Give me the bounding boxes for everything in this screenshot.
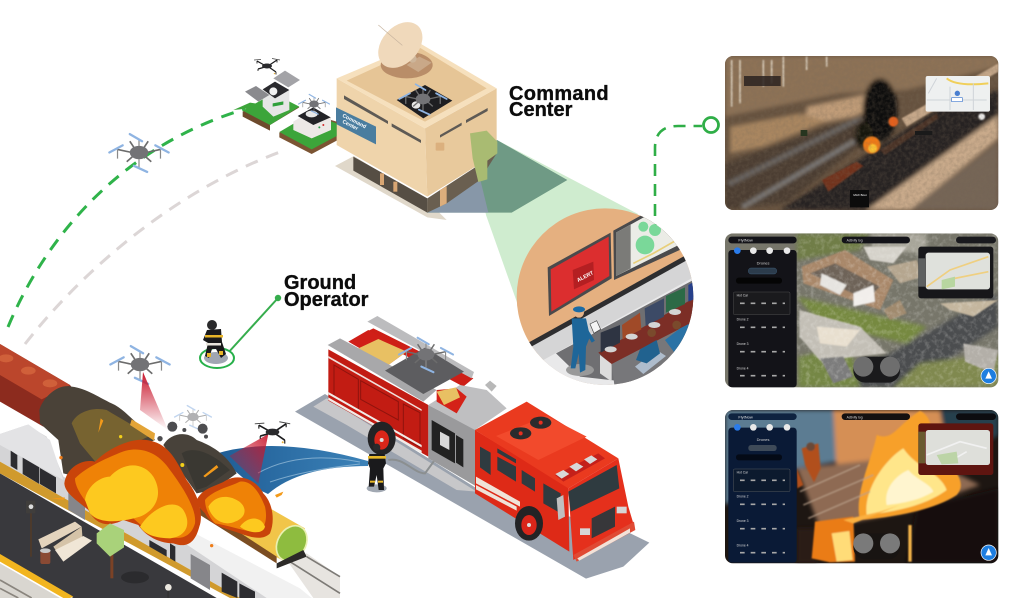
sidebar: drone list: FlytNow xyxy=(738,414,753,419)
sidebar: drone list: Drone 2 xyxy=(737,318,749,322)
lamp xyxy=(165,584,172,598)
joystick controls xyxy=(853,357,900,383)
front wheel xyxy=(515,506,543,541)
sidebar: drone list: Drone 3 xyxy=(737,342,749,346)
map screen xyxy=(613,216,680,280)
ground operator link line xyxy=(227,298,278,354)
satellite dish shadow and base xyxy=(381,52,433,78)
sidebar: drone list: Hot Car xyxy=(737,471,749,475)
tanker car xyxy=(200,503,313,568)
map inset xyxy=(918,247,993,298)
explosion small xyxy=(197,477,273,538)
map inset xyxy=(918,423,993,475)
sidebar: drone list xyxy=(728,237,797,387)
joystick controls xyxy=(853,533,900,555)
sidebar: drone list: Drones xyxy=(757,260,770,265)
sidebar: drone list: Hot Car xyxy=(737,294,749,298)
ground rails xyxy=(0,563,60,598)
texture xyxy=(797,233,998,387)
top bars: Activity log xyxy=(847,238,863,242)
satellite dish xyxy=(369,13,431,77)
passenger train xyxy=(0,424,312,598)
label: command center: Command xyxy=(509,83,609,105)
ground operator marker xyxy=(200,348,234,368)
laser cone from drone xyxy=(140,372,168,430)
command center window strips xyxy=(344,95,488,143)
drone above fire xyxy=(110,346,170,384)
dark smoke right xyxy=(157,422,237,493)
telemetry tags: MAX Bost xyxy=(853,193,867,197)
station sign xyxy=(26,501,35,557)
platform asphalt xyxy=(0,473,217,598)
cab xyxy=(475,402,633,560)
wall sign xyxy=(336,107,376,144)
top bars xyxy=(842,413,996,420)
cab back grey xyxy=(428,385,507,430)
sidebar: drone list: Drone 4 xyxy=(737,543,749,547)
sidebar: drone list: FlytNow xyxy=(738,238,753,243)
faded drone above smoke xyxy=(175,406,211,429)
explosion large xyxy=(64,440,201,545)
red box car xyxy=(0,344,87,427)
rails bottom-left xyxy=(0,580,32,598)
telemetry tags xyxy=(744,76,932,207)
bench xyxy=(38,522,92,562)
wall sign: Command xyxy=(341,113,367,130)
body side xyxy=(328,349,428,457)
top grey deck xyxy=(328,316,474,402)
sidebar: drone list: Drone 2 xyxy=(737,495,749,499)
panel: house fire drone UI xyxy=(725,410,998,563)
label: ground operator: Operator xyxy=(284,289,369,311)
label: command center xyxy=(509,83,609,121)
ground operator link dot xyxy=(275,295,281,301)
alert screen: ALERT xyxy=(576,270,595,284)
sidebar: drone list: Drone 4 xyxy=(737,366,749,370)
trash bin xyxy=(40,548,51,564)
top bars: Activity log xyxy=(847,415,863,419)
light beam from command center xyxy=(427,135,638,325)
alert button xyxy=(981,545,996,560)
map inset xyxy=(926,76,990,112)
track under tanker xyxy=(287,553,340,598)
truck shadow xyxy=(295,394,649,579)
monitors xyxy=(600,282,694,352)
docking station left xyxy=(233,71,300,131)
seated operators xyxy=(635,321,693,374)
black drone with laser xyxy=(255,422,290,444)
pump panel xyxy=(428,405,477,487)
hose bed xyxy=(348,328,473,387)
connector end circle xyxy=(704,118,718,132)
wall sign: Center xyxy=(341,119,359,132)
roof drone pad xyxy=(397,85,452,118)
platform yellow line xyxy=(0,554,73,598)
dark smoke left xyxy=(39,386,155,477)
sidebar: drone list xyxy=(728,413,797,563)
label: ground operator xyxy=(284,272,369,311)
hose on ground xyxy=(388,448,443,473)
firefighter with hose xyxy=(367,444,387,492)
rear wheel xyxy=(368,422,396,455)
drone on fire truck xyxy=(399,338,453,372)
label: ground operator: Ground xyxy=(284,272,356,294)
connector to video feed xyxy=(655,126,702,236)
top bars xyxy=(842,237,996,243)
sidebar: drone list: Drone 3 xyxy=(737,519,749,523)
standing operator xyxy=(566,306,601,376)
laser cone from black drone xyxy=(229,434,268,483)
fire truck xyxy=(295,316,649,579)
drone in flight upper left xyxy=(109,134,169,172)
panel: disaster damage drone UI xyxy=(725,233,998,387)
grille and front xyxy=(557,495,635,562)
water stream xyxy=(215,446,368,494)
drone on right docking station xyxy=(299,94,329,114)
tree xyxy=(97,523,149,583)
alert screen xyxy=(548,233,612,316)
sparks xyxy=(52,418,283,547)
label: command center: Center xyxy=(509,99,573,121)
texture xyxy=(725,56,998,210)
ground operator figure xyxy=(203,320,226,358)
command center building xyxy=(233,13,567,220)
flight path: grey dashed route xyxy=(25,152,280,344)
docking station right xyxy=(279,107,337,154)
drone on building roof xyxy=(399,84,447,115)
zoom circle: control room xyxy=(516,208,694,385)
sidebar: drone list: Drones xyxy=(757,437,770,442)
flight path: green dashed route xyxy=(8,109,245,327)
platform and accident scene xyxy=(0,344,340,598)
alert button xyxy=(981,368,996,384)
black drone above docking station xyxy=(254,58,280,74)
console desk xyxy=(598,298,694,384)
yellow reel xyxy=(437,381,497,413)
panel: train fire aerial feed xyxy=(725,56,998,210)
